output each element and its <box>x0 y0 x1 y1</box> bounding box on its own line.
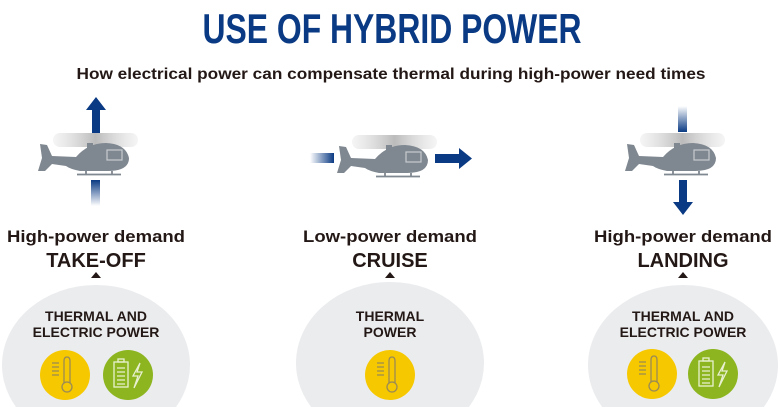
arrow stub: below <box>91 180 100 206</box>
labels: cruise <box>303 227 477 278</box>
panel: cruise power: POWER <box>364 324 416 340</box>
labels: cruise: Low-power demand <box>303 227 477 246</box>
helicopter: landing <box>625 133 725 174</box>
icon: battery <box>103 350 153 400</box>
subtitle: How electrical power can compensate thermal during high-power need times <box>76 66 706 83</box>
arrow: up <box>86 97 106 133</box>
labels: take-off: High-power demand <box>7 227 185 246</box>
labels: landing <box>594 227 772 278</box>
panel: cruise power <box>296 282 484 407</box>
icon: thermometer <box>627 349 677 399</box>
icon: battery <box>688 349 738 399</box>
panel: landing power: ELECTRIC POWER <box>620 324 746 340</box>
labels: cruise: CRUISE <box>352 250 428 272</box>
labels: take-off <box>7 227 185 278</box>
labels: take-off: TAKE-OFF <box>46 250 146 272</box>
icon: thermometer <box>365 350 415 400</box>
arrow: right <box>435 148 472 169</box>
labels: landing: High-power demand <box>594 227 772 246</box>
arrow stub: above <box>678 106 687 132</box>
panel: cruise power: THERMAL <box>356 308 425 324</box>
panel: landing power: THERMAL AND <box>632 308 734 324</box>
panel: take-off power: THERMAL AND <box>45 308 147 324</box>
labels: landing: LANDING <box>637 250 729 272</box>
panel: take-off power: ELECTRIC POWER <box>33 324 159 340</box>
arrow stub: left <box>310 153 334 163</box>
panel: take-off power <box>2 285 190 407</box>
arrow: down <box>673 180 693 215</box>
helicopter: take-off <box>38 133 138 174</box>
icon: thermometer <box>40 350 90 400</box>
helicopter: cruise <box>337 135 437 176</box>
panel: landing power <box>588 285 778 407</box>
title: USE OF HYBRID POWER <box>202 5 582 52</box>
